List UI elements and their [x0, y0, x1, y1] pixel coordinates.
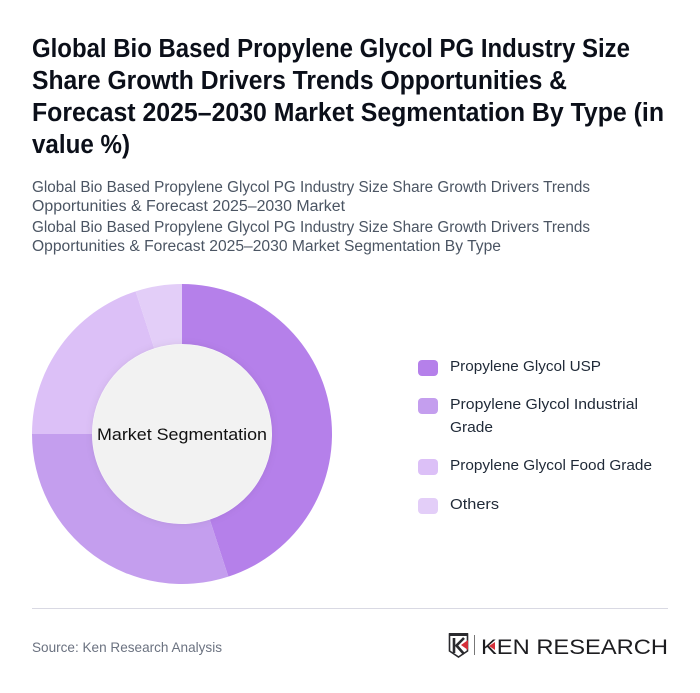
wordmark: KEN RESEARCH [481, 636, 668, 659]
title: Global Bio Based Propylene Glycol PG Industry Size [32, 35, 630, 63]
legend item: Others: Others [450, 496, 499, 513]
segment: Others [136, 284, 182, 348]
logo: Ken Research [449, 633, 668, 659]
icon: K shield [449, 633, 468, 657]
title: Share Growth Drivers Trends Opportunities & [32, 67, 567, 95]
subtitle text: Global Bio Based Propylene Glycol PG Industry Size Share Growth Drivers Trends [32, 219, 590, 236]
donut centre [92, 344, 272, 524]
subtitle text: Opportunities & Forecast 2025–2030 Market [32, 198, 346, 215]
legend item: Others [418, 496, 499, 514]
legend item: Propylene Glycol Industrial Grade: Grade [450, 419, 493, 436]
donut chart [32, 284, 332, 584]
title: value %) [32, 131, 130, 159]
centre label: Market Segmentation [97, 425, 267, 444]
subtitle text: Global Bio Based Propylene Glycol PG Industry Size Share Growth Drivers Trends [32, 179, 590, 196]
legend item: Propylene Glycol Food Grade: Propylene Glycol Food Grade [450, 457, 652, 474]
segment: Propylene Glycol USP [182, 284, 332, 577]
subtitle text: Opportunities & Forecast 2025–2030 Market Segmentation By Type [32, 238, 501, 255]
legend item: Propylene Glycol Industrial Grade: Propylene Glycol Industrial [450, 396, 638, 413]
segment: Propylene Glycol Industrial Grade [32, 434, 228, 584]
segment: Propylene Glycol Food Grade [32, 291, 154, 434]
legend item: Propylene Glycol USP: Propylene Glycol USP [450, 358, 601, 375]
source note: Source: Ken Research Analysis [32, 639, 222, 655]
title [32, 35, 664, 159]
title: Forecast 2025–2030 Market Segmentation By Type (in [32, 99, 664, 127]
subtitle text [32, 179, 590, 255]
legend item: Propylene Glycol Industrial Grade [418, 396, 638, 436]
legend [418, 358, 652, 514]
